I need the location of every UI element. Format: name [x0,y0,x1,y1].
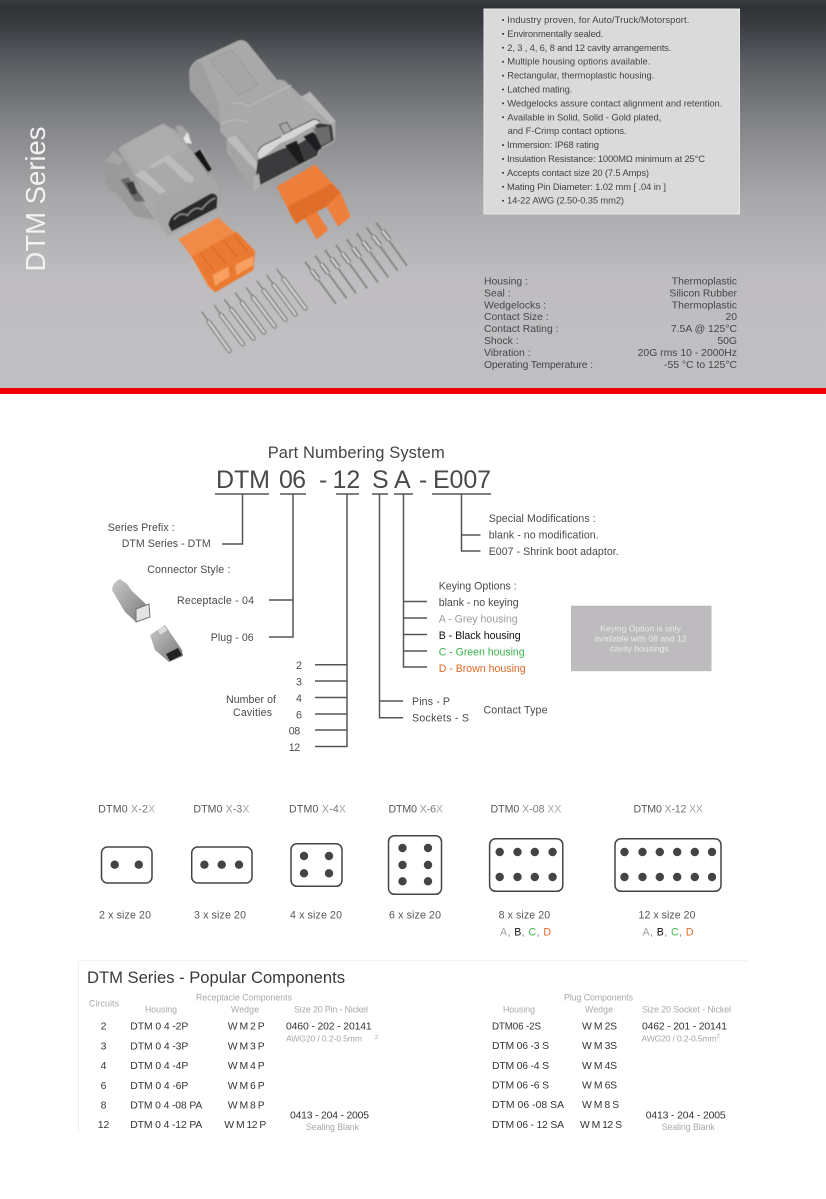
cavity numbers [226,660,302,754]
keying options labels [439,580,526,675]
header background panel [0,0,826,388]
specifications list: Thermoplastic [672,300,737,311]
cavity arrangement: 12 way: 12 x size 20 [638,910,696,922]
feature list panel: Latched mating. [507,84,572,94]
red divider band [0,388,826,394]
table: plug components: W M 8 S [582,1100,619,1111]
specifications list: -55 °C to 125°C [664,360,737,371]
table: plug components: W M 2S [582,1022,617,1032]
specifications list: Operating Temperature : [484,360,593,371]
cavity arrangement: 4 way [289,804,346,922]
specifications list: Contact Rating : [484,324,559,335]
cavity numbers: 08 [289,726,300,738]
keying options labels: blank - no keying [439,597,519,609]
table: receptacle components: W M 12 P [224,1120,266,1131]
table: receptacle components: 8 [101,1100,107,1112]
cavity numbers: 6 [296,710,302,722]
cavity arrangement: 3 way [192,804,252,922]
feature list panel: Accepts contact size 20 (7.5 Amps) [507,167,649,178]
table: receptacle components: 6 [101,1081,107,1092]
table: receptacle components: Circuits [89,998,120,1008]
table: receptacle components: W M 6 P [228,1081,265,1092]
small orange wedge [277,164,351,239]
icon: receptacle connector thumbnail [112,579,150,622]
table: plug components: DTM 06 -4 S [492,1061,549,1072]
table: receptacle components: Housing [145,1005,177,1015]
feature list panel: 14-22 AWG (2.50-0.35 mm2) [507,195,624,206]
keying note callout [571,606,712,671]
feature list panel: Rectangular, thermoplastic housing. [507,70,654,81]
icon: plug connector thumbnail [150,625,183,662]
table: receptacle components: W M 3 P [228,1041,265,1052]
table: plug components: DTM 06 -3 S [492,1041,549,1052]
cavity arrangement: 2 way [98,804,155,922]
table: plug components: Plug Components [564,993,634,1003]
table: receptacle components: W M 4 P [228,1061,265,1072]
feature bullets [502,19,504,202]
series prefix and connector style labels: DTM Series - DTM [122,538,211,550]
table: receptacle components: AWG20 / 0.2-0.5mm [286,1034,362,1044]
cavity arrangement: 3 way: 3 x size 20 [194,910,246,922]
part number code: 06 [279,466,306,494]
table: plug components: Wedge [585,1005,613,1015]
series prefix and connector style labels: Series Prefix : [108,522,175,534]
special modifications labels: E007 - Shrink boot adaptor. [489,546,619,558]
table: plug components: DTM 06 - 12 SA [492,1120,564,1131]
feature list panel: 2, 3 , 4, 6, 8 and 12 cavity arrangements. [507,42,671,53]
specifications list: Shock : [484,336,519,347]
special modifications labels [489,513,619,558]
vertical series title: DTM Series [20,126,51,272]
components heading: DTM Series - Popular Components [87,968,345,987]
special modifications labels: Special Modifications : [489,513,596,525]
cavity numbers: 3 [296,676,302,688]
cavity arrangement: 12 way: DTM0 X-12 XX [634,804,703,816]
feature list panel: Multiple housing options available. [507,56,650,67]
table: plug components: Sealing Blank [662,1122,715,1132]
table: plug components: 0413 - 204 - 2005 [646,1110,726,1121]
cavity numbers: 4 [296,693,302,705]
specifications list: Thermoplastic [672,276,737,288]
keying note callout: available with 08 and 12 [594,634,687,644]
feature list panel: Industry proven, for Auto/Truck/Motorsport. [507,14,689,25]
table: plug components: AWG20 / 0.2-0.5mm [642,1034,716,1044]
table: plug components: DTM06 -2S [492,1022,541,1032]
part number code: A [394,466,411,494]
large orange wedge [178,217,255,292]
table: receptacle components: 12 [98,1120,109,1131]
table: receptacle components: Receptacle Components [196,993,293,1003]
specifications list: Contact Size : [484,312,549,323]
feature list panel: Mating Pin Diameter: 1.02 mm [ .04 in ] [507,181,666,192]
series prefix and connector style labels: Connector Style : [147,564,230,576]
bracket lines for part number [215,494,491,746]
table: receptacle components: 0413 - 204 - 2005 [290,1110,369,1121]
specifications list: 20 [725,312,737,323]
specifications list: Wedgelocks : [484,300,546,311]
table: plug components: DTM 06 -08 SA [492,1100,564,1111]
feature list panel: Wedgelocks assure contact alignment and retention. [507,97,722,108]
cavity arrangement: 3 way: DTM0 X-3X [193,804,249,816]
cavity arrangement: 2 way: 2 x size 20 [99,910,151,922]
table: receptacle components: DTM 0 4 -3P [130,1041,188,1052]
table: receptacle components: 2 [375,1035,378,1041]
cavity arrangement: 8 way: 8 x size 20 [499,910,550,922]
feature list panel: Environmentally sealed. [507,28,603,39]
table: plug components: W M 4S [582,1061,617,1072]
cavity numbers: Cavities [233,707,272,719]
right pin contacts [305,222,407,304]
table: receptacle components: 3 [101,1041,107,1052]
part number code [216,466,491,494]
feature list panel: and F-Crimp contact options. [508,125,627,136]
contact type labels: Sockets - S [412,712,469,724]
keying options labels: B - Black housing [439,630,521,642]
series prefix and connector style labels [108,522,254,644]
feature list panel: Available in Solid, Solid - Gold plated, [507,111,661,122]
feature list panel: Immersion: IP68 rating [507,139,599,150]
large plug connector [189,40,336,192]
product photo: connectors, wedges and contacts [104,40,407,352]
cavity arrangement: 4 way: 4 x size 20 [290,910,342,922]
cavity arrangement: 6 way: DTM0 X-6X [388,804,443,816]
keying options labels: Keying Options : [439,580,517,592]
part numbering heading: Part Numbering System [268,444,445,462]
table: receptacle components: W M 8 P [228,1100,265,1112]
table: receptacle components: DTM 0 4 -2P [130,1022,188,1032]
table: plug components: Size 20 Socket - Nickel [642,1005,731,1015]
part number code: E007 [433,466,491,494]
table: receptacle components: 2 [101,1022,107,1032]
specifications list: Seal : [484,288,511,299]
cavity numbers: Number of [226,694,276,706]
small receptacle connector [104,123,219,236]
table: receptacle components: Sealing Blank [306,1122,360,1132]
table: receptacle components: 4 [101,1061,107,1072]
cavity arrangement: 6 way: 6 x size 20 [389,910,441,922]
table: plug components: W M 3S [582,1041,617,1052]
specifications list: Silicon Rubber [669,288,738,299]
table: receptacle components: DTM 0 4 -6P [130,1081,188,1092]
cavity arrangement: 6 way [388,804,443,922]
cavity arrangement: 8 way [490,804,563,939]
table: receptacle components [89,993,378,1132]
table: plug components: W M 6S [582,1080,617,1092]
specifications list: Vibration : [484,348,531,359]
keying note callout: Keying Option is only [600,624,682,634]
cavity numbers: 12 [289,742,300,754]
specifications list: 20G rms 10 - 2000Hz [638,348,737,359]
table: receptacle components: 0460 - 202 - 20141 [286,1022,372,1032]
cavity numbers: 2 [296,660,302,672]
table: plug components: DTM 06 -6 S [492,1080,549,1092]
left socket contacts [202,269,306,352]
contact type labels: Pins - P [412,696,450,708]
photo parts in shared coordinates [178,164,407,352]
cavity arrangement: 2 way: DTM0 X-2X [98,804,155,816]
series prefix and connector style labels: Receptacle - 04 [177,595,254,607]
cavity arrangement: 8 way: A, B, C, D [500,927,551,939]
specifications list: 50G [717,336,737,347]
keying options labels: D - Brown housing [439,663,526,675]
special modifications labels: blank - no modification. [489,530,599,542]
part number code: - [319,466,327,494]
table: receptacle components: Wedge [231,1005,259,1015]
contact type labels [412,696,548,724]
cavity arrangement: 8 way: DTM0 X-08 XX [490,804,562,816]
table: plug components: Housing [503,1005,535,1015]
specifications list: Housing : [484,276,528,288]
part number code: - [419,466,427,494]
cavity arrangement: 12 way [615,804,721,939]
part number code: S [372,466,389,494]
contact type labels: Contact Type [484,704,548,716]
keying options labels: C - Green housing [439,646,525,658]
cavity arrangement: 12 way: A, B, C, D [642,927,694,939]
keying note callout: cavity housings. [610,644,671,654]
part number code: DTM [216,466,270,494]
panel: popular components frame [78,960,747,1133]
table: receptacle components: Size 20 Pin - Nickel [294,1005,368,1015]
feature list panel [484,9,740,214]
part number code: 12 [332,466,360,494]
series prefix and connector style labels: Plug - 06 [211,632,254,644]
table: receptacle components: DTM 0 4 -4P [130,1061,188,1072]
cavity arrangement: 4 way: DTM0 X-4X [289,804,346,816]
feature list panel: Insulation Resistance: 1000MΩ minimum at 25°C [507,153,705,164]
table: plug components: 0462 - 201 - 20141 [642,1022,727,1032]
table: receptacle components: DTM 0 4 -12 PA [130,1120,202,1131]
table: receptacle components: DTM 0 4 -08 PA [130,1100,202,1112]
table: receptacle components: W M 2 P [228,1022,265,1032]
table: plug components: 2 [717,1034,720,1040]
table: plug components: W M 12 S [580,1120,622,1131]
specifications list [484,276,738,371]
specifications list: 7.5A @ 125°C [671,324,737,335]
table: plug components [492,993,731,1132]
keying options labels: A - Grey housing [439,614,518,626]
